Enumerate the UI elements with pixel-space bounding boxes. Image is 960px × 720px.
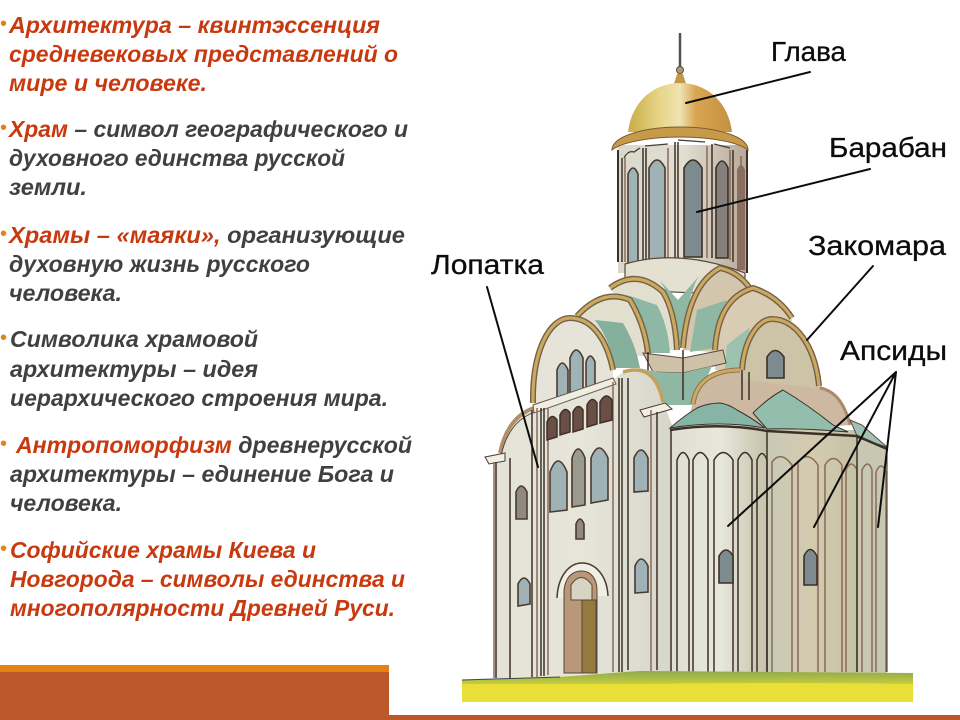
paragraph: anthropomorphism: Антропоморфизм древнерусской: [15, 432, 412, 458]
paragraph: beacons: •: [0, 223, 7, 245]
label: Барабан: Барабан: [829, 132, 947, 163]
paragraph: temple: земли.: [9, 174, 87, 200]
label: Лопатка: Лопатка: [431, 249, 544, 280]
label: Апсиды: [728, 335, 947, 527]
paragraph: anthropomorphism: •: [0, 433, 7, 455]
drum: [618, 140, 747, 273]
paragraph: temple: [0, 116, 408, 200]
paragraph: beacons: [0, 222, 405, 306]
paragraph: anthropomorphism: человека.: [10, 490, 122, 516]
illustration: church with labelled parts: [431, 33, 947, 702]
paragraph: Sophia cathedrals: Софийские храмы Киева и: [10, 537, 316, 563]
paragraph: symbolism: •: [0, 327, 7, 349]
paragraph: temple: Храм – символ географического и: [7, 116, 408, 142]
back tan wall: [690, 369, 850, 432]
panel: text column: [0, 12, 412, 621]
small arch G: [623, 370, 663, 402]
apse windows: [719, 550, 817, 585]
paragraph: architecture: мире и человеке.: [9, 70, 207, 96]
arch E: [715, 288, 792, 370]
drum base: [625, 258, 745, 295]
paragraph: beacons: человека.: [9, 280, 122, 306]
label: Закомара: [807, 230, 946, 340]
paragraph: symbolism: [0, 326, 388, 411]
paragraph: architecture: [0, 12, 398, 96]
label: Барабан: [697, 132, 947, 212]
centre band and lower green: [638, 350, 726, 405]
paragraph: Sophia cathedrals: [0, 537, 405, 621]
label: Апсиды: Апсиды: [840, 335, 947, 366]
paragraph: symbolism: архитектуры – идея: [10, 356, 258, 382]
paragraph: Sophia cathedrals: •: [0, 538, 7, 560]
label: Закомара: Закомара: [808, 230, 946, 261]
footer bars: [0, 665, 960, 720]
paragraph: temple: •: [0, 117, 7, 139]
paragraph: beacons: Храмы – «маяки», организующие: [7, 222, 405, 248]
portal: [557, 563, 608, 673]
paragraph: architecture: средневековых представлений о: [9, 41, 398, 67]
arch A: [533, 318, 613, 410]
arch C: [610, 279, 677, 353]
label: Лопатка: [431, 249, 544, 467]
centre green strips: [655, 275, 700, 345]
paragraph: anthropomorphism: [0, 432, 412, 516]
paragraph: Sophia cathedrals: многополярности Древней Руси.: [10, 595, 395, 621]
roof: green vaults and zakomaras: [533, 258, 850, 432]
paragraph: architecture: Архитектура – квинтэссенция: [8, 12, 380, 38]
paragraph: symbolism: иерархического строения мира.: [10, 385, 388, 411]
paragraph: beacons: духовную жизнь русского: [9, 251, 310, 277]
body walls: [485, 370, 887, 678]
dome: [612, 83, 748, 150]
label: Глава: Глава: [771, 36, 846, 67]
ground: [462, 671, 913, 702]
arch D: [683, 268, 750, 352]
spire: [674, 33, 686, 84]
paragraph: anthropomorphism: архитектуры – единение Бога и: [10, 461, 394, 487]
arch H: [693, 370, 850, 425]
apse arcades: [677, 430, 887, 672]
paragraph: symbolism: Символика храмовой: [10, 326, 258, 352]
facade pilasters: [496, 378, 671, 678]
apse roofs: [670, 390, 887, 449]
facade windows: [516, 448, 648, 606]
paragraph: Sophia cathedrals: Новгорода – символы единства и: [10, 566, 405, 592]
paragraph: temple: духовного единства русской: [9, 145, 345, 171]
cornices: [485, 453, 505, 464]
arcade windows: [547, 396, 612, 440]
arch B: [577, 296, 648, 368]
paragraph: architecture: •: [0, 13, 7, 35]
arch F: [742, 319, 819, 388]
label: Глава: [686, 36, 846, 103]
